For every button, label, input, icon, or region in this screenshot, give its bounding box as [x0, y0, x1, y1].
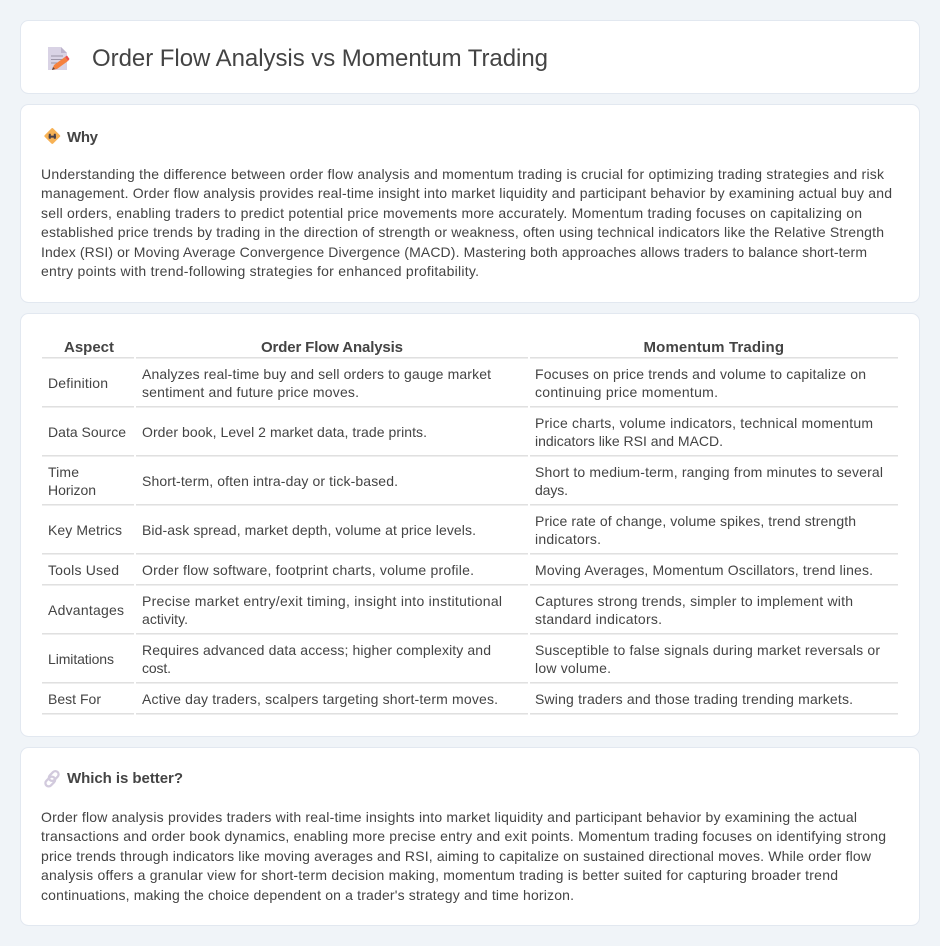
row: key metrics: indicators.: [535, 531, 601, 547]
table header: Aspect: [64, 339, 114, 356]
table header: Momentum Trading: [644, 339, 784, 356]
which is better text block: analysis offers a granular view for short-term decision making, momentum trading is better suited for capturing broader trend: [41, 867, 838, 883]
icon: warning diamond: [44, 128, 61, 144]
row: limitations: Limitations: [48, 651, 114, 667]
row: definition: continuing price momentum.: [535, 384, 718, 400]
why text block: Index (RSI) or Moving Average Convergence Divergence (MACD). Mastering both approaches allows traders to balance short-term: [41, 244, 867, 260]
row: time horizon: Time: [48, 464, 79, 480]
row: time horizon: Short-term, often intra-day or tick-based.: [142, 473, 398, 489]
row: tools used: Tools Used: [48, 562, 119, 578]
panel: title: [20, 20, 920, 94]
row: data source: Data Source: [48, 424, 126, 440]
row: limitations: low volume.: [535, 660, 611, 676]
row: key metrics: [48, 513, 856, 547]
row: definition: [48, 366, 866, 400]
row: tools used: [48, 562, 873, 578]
table header: Order Flow Analysis: [261, 339, 403, 356]
table header: [64, 339, 784, 356]
row: advantages: Advantages: [48, 602, 124, 618]
panel: why: [20, 104, 920, 302]
row: limitations: Requires advanced data access; higher complexity and: [142, 642, 491, 658]
panel: comparison table: [20, 314, 920, 736]
why text block: management. Order flow analysis provides real-time insight into market liquidity and participant behavior by examining actual buy and: [41, 185, 892, 201]
icon: chain link: [44, 770, 60, 788]
why text block: entry points with trend-following strategies for enhanced profitability.: [41, 263, 479, 279]
row: limitations: Susceptible to false signals during market reversals or: [535, 642, 880, 658]
why text block: Understanding the difference between order flow analysis and momentum trading is crucial for optimizing trading strategies and risk: [41, 166, 885, 182]
row: data source: [48, 415, 873, 449]
row: best for: [48, 691, 853, 707]
row: limitations: [48, 642, 880, 676]
row: best for: Swing traders and those trading trending markets.: [535, 691, 853, 707]
row: key metrics: Key Metrics: [48, 522, 122, 538]
why text block: [41, 166, 892, 279]
which is better text block: [41, 809, 886, 903]
panel: which is better: [20, 748, 920, 926]
which is better text block: Order flow analysis provides traders with real-time insights into market liquidity and participant behavior by examining the actual: [41, 809, 857, 825]
heading: why: Why: [67, 129, 99, 146]
row: data source: indicators like RSI and MACD.: [535, 433, 723, 449]
row: key metrics: Bid-ask spread, market depth, volume at price levels.: [142, 522, 476, 538]
heading: which is better: Which is better?: [67, 770, 183, 787]
row: advantages: [48, 593, 853, 627]
why text block: established price trends by trading in the direction of strength or weakness, often using technical indicators like the Relative Strength: [41, 224, 884, 240]
row: advantages: Precise market entry/exit timing, insight into institutional: [142, 593, 502, 609]
row: time horizon: [48, 464, 883, 498]
row: best for: Active day traders, scalpers targeting short-term moves.: [142, 691, 498, 707]
row: advantages: activity.: [142, 611, 188, 627]
row: key metrics: Price rate of change, volume spikes, trend strength: [535, 513, 856, 529]
row: definition: Definition: [48, 375, 108, 391]
row: tools used: Moving Averages, Momentum Oscillators, trend lines.: [535, 562, 873, 578]
row: definition: Focuses on price trends and volume to capitalize on: [535, 366, 866, 382]
row: time horizon: Horizon: [48, 482, 96, 498]
row: time horizon: Short to medium-term, ranging from minutes to several: [535, 464, 883, 480]
row: data source: Order book, Level 2 market data, trade prints.: [142, 424, 427, 440]
row: time horizon: days.: [535, 482, 568, 498]
row: tools used: Order flow software, footprint charts, volume profile.: [142, 562, 474, 578]
row: limitations: cost.: [142, 660, 171, 676]
row: advantages: Captures strong trends, simpler to implement with: [535, 593, 853, 609]
title text: Order Flow Analysis vs Momentum Trading: [92, 45, 548, 72]
row: advantages: standard indicators.: [535, 611, 662, 627]
icon: document with pencil: [48, 47, 70, 70]
which is better text block: continuations, making the choice dependent on a trader's strategy and time horizon.: [41, 887, 574, 903]
row: definition: Analyzes real-time buy and sell orders to gauge market: [142, 366, 491, 382]
why text block: sell orders, enabling traders to predict potential price movements more accurately. Momentum trading focuses on capitalizing on: [41, 205, 862, 221]
which is better text block: price trends through indicators like moving averages and RSI, aiming to capitalize on sustained directional moves. While order flow: [41, 848, 872, 864]
which is better text block: transactions and order book dynamics, enabling more precise entry and exit points. Momentum trading focuses on identifying strong: [41, 828, 886, 844]
row: best for: Best For: [48, 691, 101, 707]
row: definition: sentiment and future price moves.: [142, 384, 359, 400]
row: data source: Price charts, volume indicators, technical momentum: [535, 415, 873, 431]
